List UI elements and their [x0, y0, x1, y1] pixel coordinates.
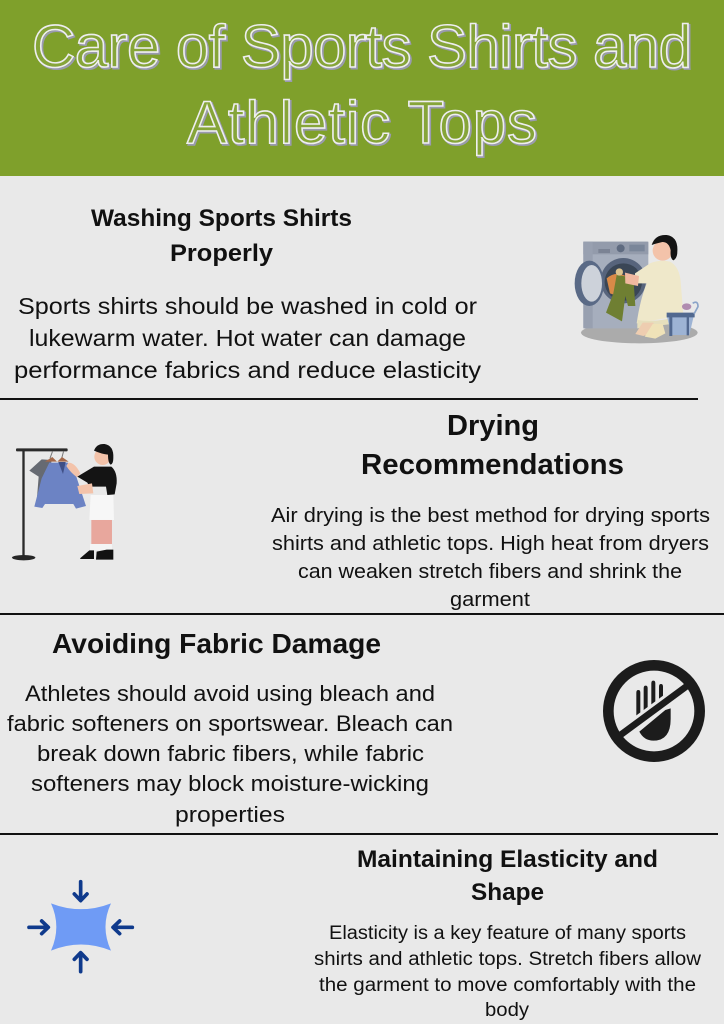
- divider: [0, 833, 718, 835]
- text: fabric damage body: properties: [175, 802, 285, 827]
- title: Care of Sports Shirts and: [34, 14, 694, 82]
- text: elasticity body: body: [485, 1000, 530, 1021]
- heading: drying: [361, 410, 624, 481]
- panel: washing: [14, 205, 698, 383]
- text: washing body: Sports shirts should be washed in cold or: [18, 293, 477, 319]
- text: drying body: shirts and athletic tops. High heat from dryers: [272, 533, 709, 555]
- heading: drying: Drying: [447, 410, 539, 442]
- divider: [0, 613, 724, 615]
- title: Athletic Tops: [188, 90, 538, 158]
- text: fabric damage body: fabric softeners on sportswear. Bleach can: [7, 711, 453, 736]
- heading: drying: Recommendations: [361, 449, 624, 481]
- text: fabric damage body: Athletes should avoid using bleach and: [25, 681, 435, 706]
- text: elasticity body: [314, 923, 701, 1021]
- text: washing body: [14, 293, 482, 383]
- icon: compression arrows: [29, 882, 132, 972]
- title: Care of Sports Shirts and: [32, 13, 692, 80]
- heading: fabric damage: Avoiding Fabric Damage: [52, 628, 381, 659]
- text: drying body: garment: [450, 589, 530, 611]
- heading: washing: Washing Sports Shirts: [91, 205, 352, 232]
- text: fabric damage body: break down fabric fibers, while fabric: [37, 741, 424, 766]
- text: elasticity body: Elasticity is a key feature of many sports: [329, 923, 686, 944]
- icon: woman at washing machine: [575, 235, 698, 343]
- heading: washing: Properly: [170, 240, 274, 267]
- text: elasticity body: shirts and athletic tops. Stretch fibers allow: [314, 949, 701, 970]
- panel: drying: [12, 410, 710, 611]
- text: drying body: Air drying is the best method for drying sports: [271, 505, 710, 527]
- text: washing body: performance fabrics and reduce elasticity: [14, 357, 482, 383]
- text: drying body: can weaken stretch fibers and shrink the: [298, 561, 682, 583]
- panel: elasticity: [29, 846, 701, 1021]
- title: [32, 13, 694, 158]
- header banner: [0, 0, 724, 176]
- icon: no hand symbol: [608, 665, 700, 757]
- text: elasticity body: the garment to move comfortably with the: [319, 975, 696, 996]
- title: Athletic Tops: [187, 89, 537, 156]
- panel: fabric damage: [7, 628, 700, 827]
- text: washing body: lukewarm water. Hot water can damage: [29, 325, 466, 351]
- text: fabric damage body: softeners may block moisture-wicking: [31, 771, 429, 796]
- heading: elasticity: Shape: [471, 879, 544, 906]
- heading: washing: [91, 205, 352, 267]
- heading: elasticity: Maintaining Elasticity and: [357, 846, 658, 873]
- heading: elasticity: [357, 846, 658, 906]
- text: drying body: [271, 505, 710, 611]
- text: fabric damage body: [7, 681, 453, 827]
- divider: [0, 398, 698, 400]
- icon: woman with clothes rack: [12, 444, 117, 560]
